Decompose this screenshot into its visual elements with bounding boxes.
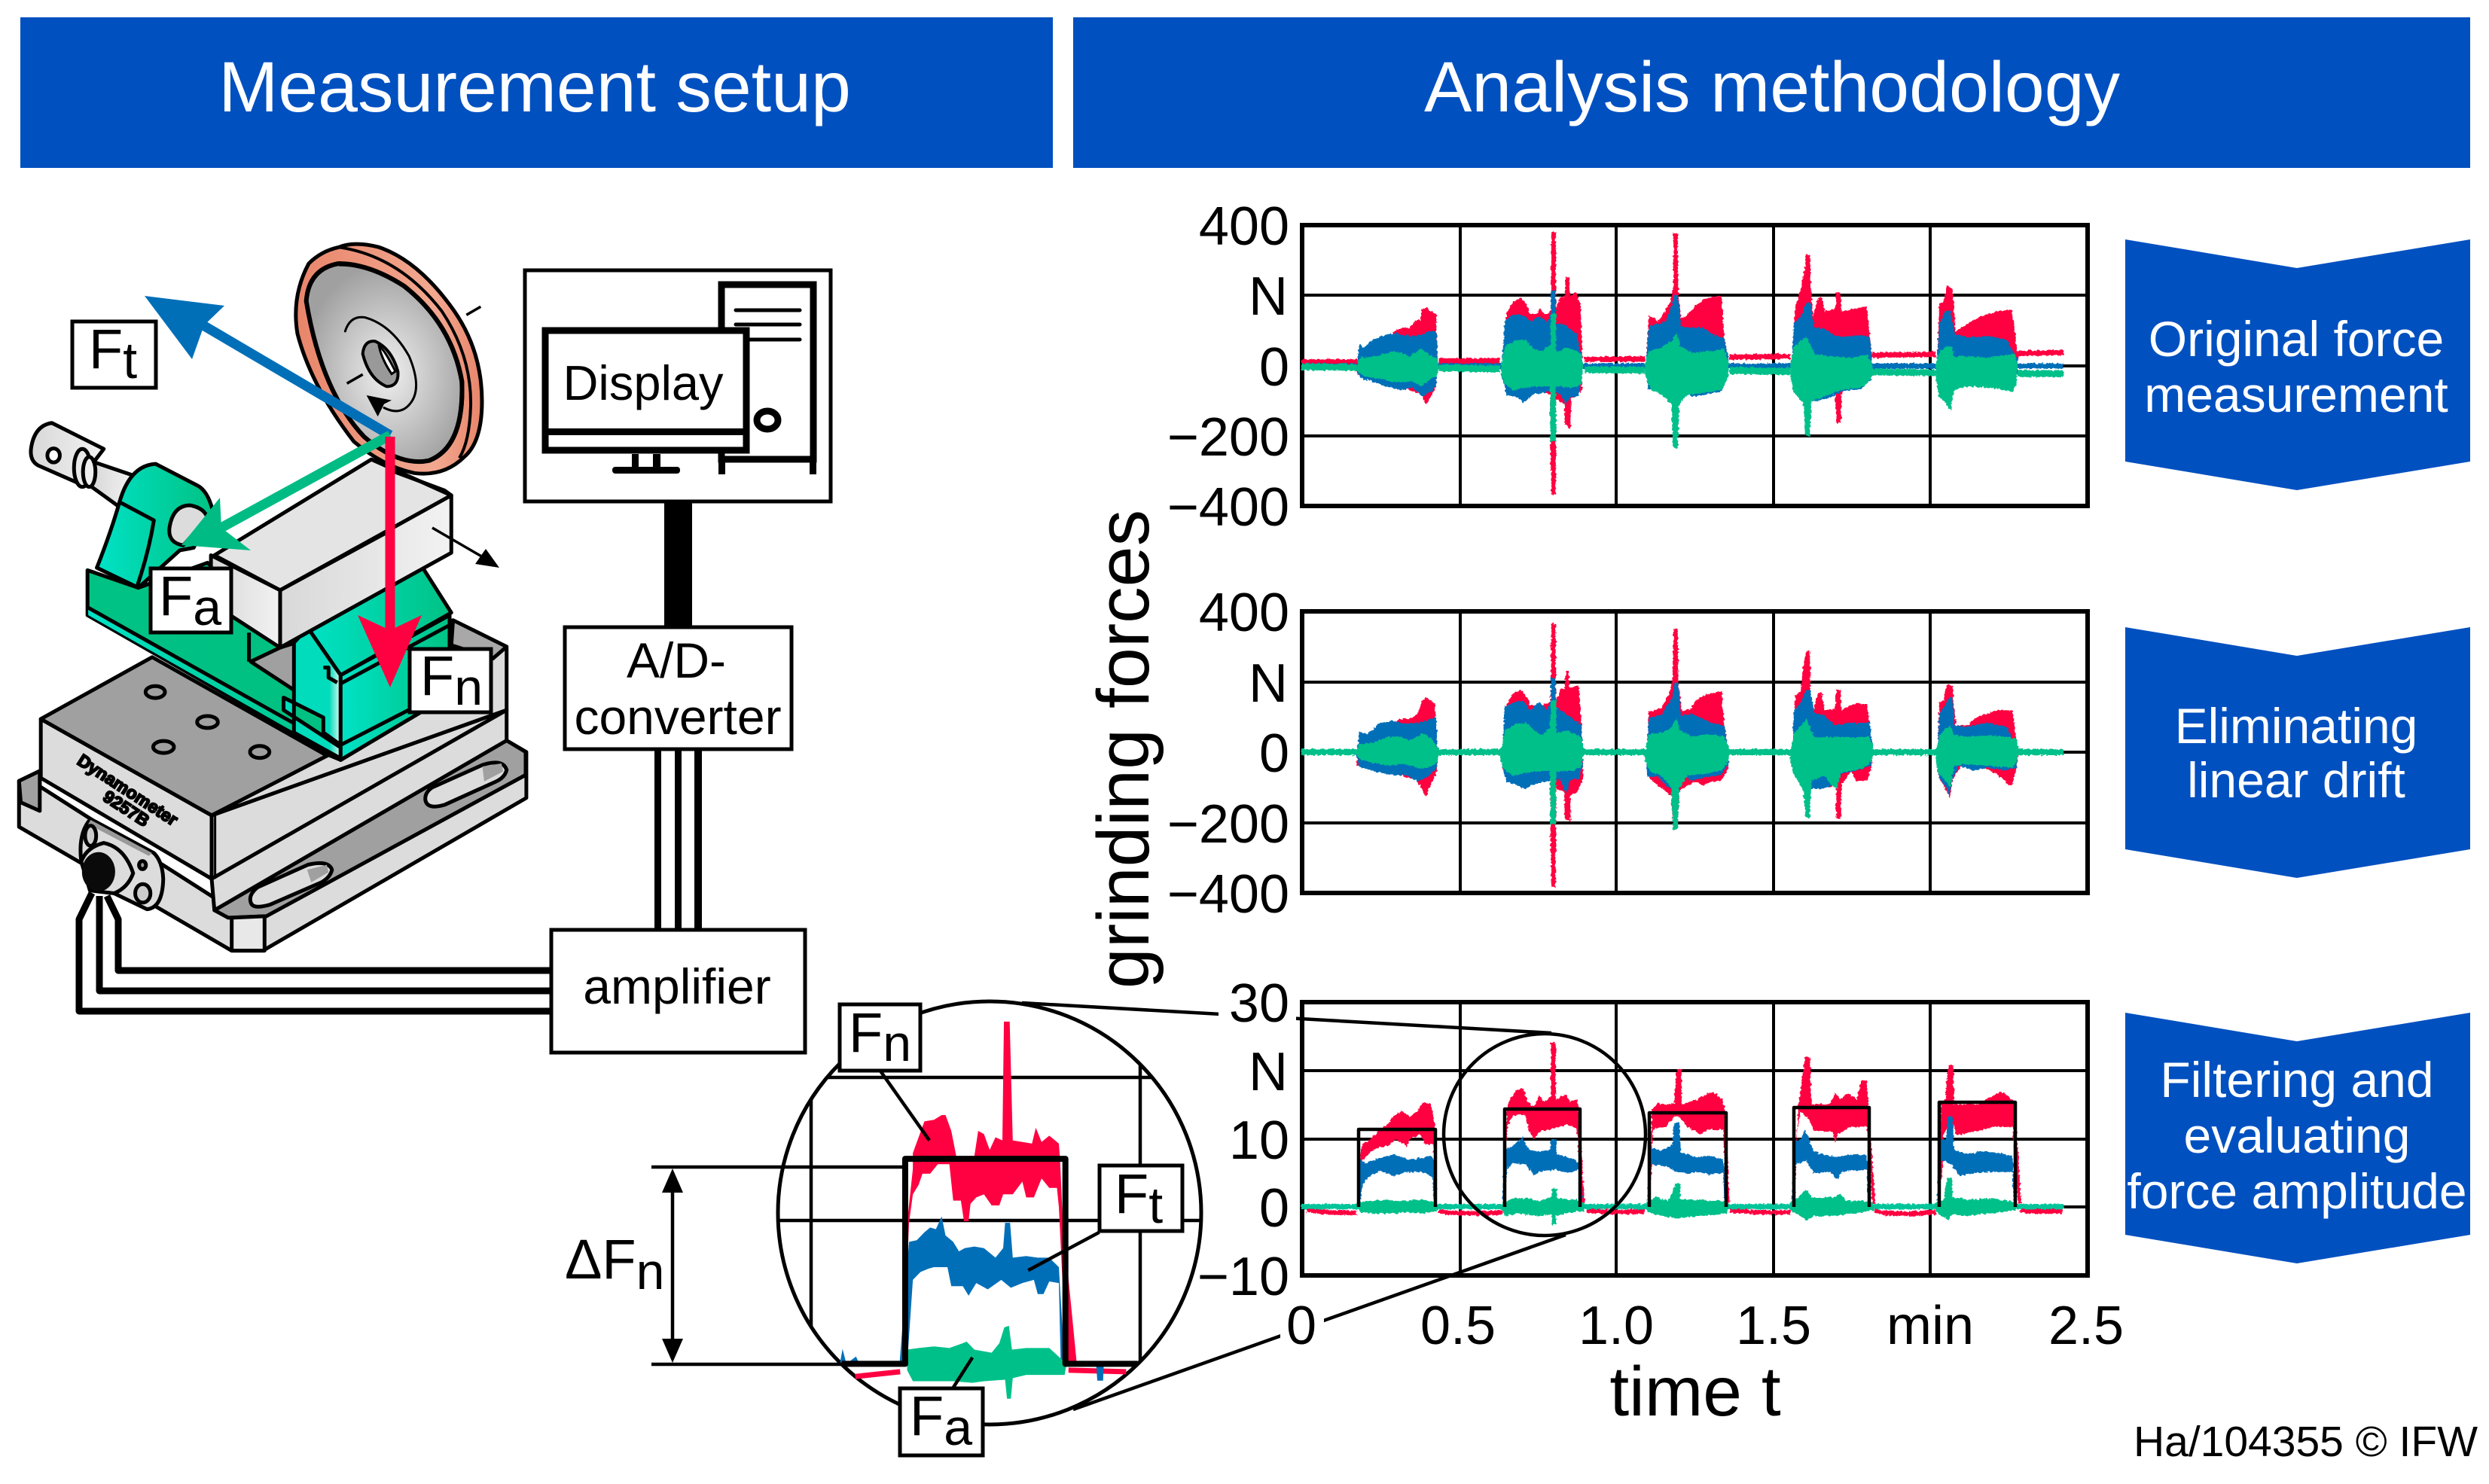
dimension: delta Fn xyxy=(565,1167,904,1364)
x axis tick labels: 0.5 xyxy=(1420,1296,1496,1356)
dimension: delta Fn: ΔF xyxy=(565,1228,636,1291)
arrow: normal force xyxy=(358,437,422,687)
label: Fa xyxy=(151,565,231,636)
magnifier: connecting lines and small circle xyxy=(1022,1003,1646,1409)
y axis labels: −200 xyxy=(1167,407,1289,468)
wires: amplifier to converter xyxy=(654,749,702,930)
box: amplifier: amplifier xyxy=(583,958,771,1014)
chart frame and grid xyxy=(1302,611,2088,893)
monitor xyxy=(545,331,746,474)
computer tower xyxy=(718,285,816,474)
header: Analysis methodology: Analysis methodology xyxy=(1424,47,2121,127)
inset label: Ft: t xyxy=(1148,1177,1163,1234)
dynamometer nameplate text: 9257B xyxy=(99,786,153,830)
inset label: Fa: a xyxy=(944,1399,972,1456)
thick cable: computer to converter xyxy=(664,501,692,627)
x axis tick labels: min xyxy=(1887,1296,1974,1356)
label: Ft xyxy=(72,318,156,389)
step: eliminating linear drift: linear drift xyxy=(2187,752,2405,808)
step: original force measurement: measurement xyxy=(2144,367,2448,422)
cables from dynamometer to amplifier xyxy=(79,893,551,1011)
inset label: Ft xyxy=(1100,1163,1182,1234)
chart frame and grid xyxy=(1302,225,2088,506)
chart: filtered forces and amplitude xyxy=(1301,1002,2088,1275)
vice, shaft and workpiece xyxy=(31,423,451,760)
chart: drift eliminated xyxy=(1167,583,2088,925)
y axis labels: 400 xyxy=(1199,583,1289,643)
chart frame and grid xyxy=(1302,1002,2088,1275)
dynamometer nameplate text: Dynamometer xyxy=(74,750,181,830)
inset: magnified force cycle xyxy=(776,1000,1203,1458)
inset label: Fn: F xyxy=(849,1001,883,1064)
y axis labels, filtered chart: 10 xyxy=(1229,1111,1289,1171)
axis title: time t: time t xyxy=(1609,1352,1781,1431)
arrow: axial force xyxy=(181,435,390,550)
x axis tick labels: 2.5 xyxy=(2048,1296,2124,1356)
inset grid xyxy=(780,1065,1199,1361)
y axis labels xyxy=(1167,197,1289,538)
credit: Ha/104355 © IFW xyxy=(2134,1418,2478,1466)
y axis labels, filtered chart: 0 xyxy=(1259,1178,1289,1239)
step: filtering and evaluating force amplitude: force amplitude xyxy=(2127,1163,2467,1219)
y axis labels xyxy=(1167,583,1289,925)
force traces xyxy=(1301,232,2063,495)
x axis tick labels: 1.5 xyxy=(1736,1296,1811,1356)
box: A/D converter xyxy=(565,627,792,749)
chart: original force measurement xyxy=(1167,197,2088,538)
step: filtering and evaluating force amplitude xyxy=(2125,1013,2470,1263)
box: amplifier xyxy=(551,930,805,1053)
label: Fn: F xyxy=(420,644,454,707)
label: Fn xyxy=(410,644,491,716)
inset label: Fa: F xyxy=(910,1385,944,1447)
arrow: feed direction xyxy=(432,528,499,568)
y axis labels, filtered chart: −10 xyxy=(1197,1247,1289,1307)
label: Fn: n xyxy=(454,659,483,716)
icon: grinding wheel xyxy=(296,244,482,474)
inset label: Fn: n xyxy=(883,1015,911,1072)
inset traces xyxy=(840,1022,1138,1399)
inset label: Fa xyxy=(900,1385,983,1456)
step: filtering and evaluating force amplitude: Filtering and xyxy=(2160,1052,2434,1108)
x axis tick labels: 1.0 xyxy=(1579,1296,1654,1356)
step: filtering and evaluating force amplitude: evaluating xyxy=(2184,1108,2410,1163)
y axis labels, filtered chart: 30 xyxy=(1229,974,1289,1034)
monitor: Display xyxy=(563,355,724,410)
dimension: delta Fn: n xyxy=(636,1243,664,1300)
force traces xyxy=(1301,623,2063,887)
box: A/D converter: converter xyxy=(574,689,782,745)
y axis labels: 400 xyxy=(1199,197,1289,257)
panel: machine illustration with dynamometer, vice, workpiece xyxy=(19,244,526,951)
header: Measurement setup xyxy=(20,17,1053,168)
label: Ft: t xyxy=(123,332,137,389)
header: Analysis methodology xyxy=(1073,17,2470,168)
filtered force traces xyxy=(1301,1043,2063,1225)
y axis labels: −200 xyxy=(1167,794,1289,855)
amplitude rectangles xyxy=(1359,1102,2015,1207)
icon: computer with display xyxy=(525,270,831,501)
x axis tick labels xyxy=(1280,1296,2124,1356)
y axis labels: N xyxy=(1249,267,1288,327)
step: original force measurement xyxy=(2125,239,2470,490)
y axis labels: 0 xyxy=(1259,724,1289,784)
box: A/D converter: A/D- xyxy=(627,632,726,688)
cable connector xyxy=(81,819,163,910)
step: original force measurement: Original force xyxy=(2149,311,2444,367)
y axis labels: −400 xyxy=(1167,477,1289,538)
dynamometer and base plate xyxy=(19,620,526,951)
label: Ft: F xyxy=(89,318,123,380)
label: Fa: a xyxy=(193,579,221,636)
y axis labels: 0 xyxy=(1259,337,1289,398)
axis title: grinding forces: grinding forces xyxy=(1082,510,1164,989)
step: eliminating linear drift xyxy=(2125,627,2470,878)
y axis labels: −400 xyxy=(1167,864,1289,925)
label: Fa: F xyxy=(159,565,193,627)
step: eliminating linear drift: Eliminating xyxy=(2175,698,2417,754)
y axis labels, filtered chart: N xyxy=(1249,1042,1288,1102)
arrow: tangential force xyxy=(145,296,390,435)
header: Measurement setup: Measurement setup xyxy=(218,47,851,127)
inset label: Fn xyxy=(840,1001,920,1072)
y axis labels: N xyxy=(1249,654,1288,714)
y axis labels, filtered chart xyxy=(1197,974,1296,1307)
inset label: Ft: F xyxy=(1115,1163,1148,1225)
x axis tick labels: 0 xyxy=(1286,1296,1316,1356)
